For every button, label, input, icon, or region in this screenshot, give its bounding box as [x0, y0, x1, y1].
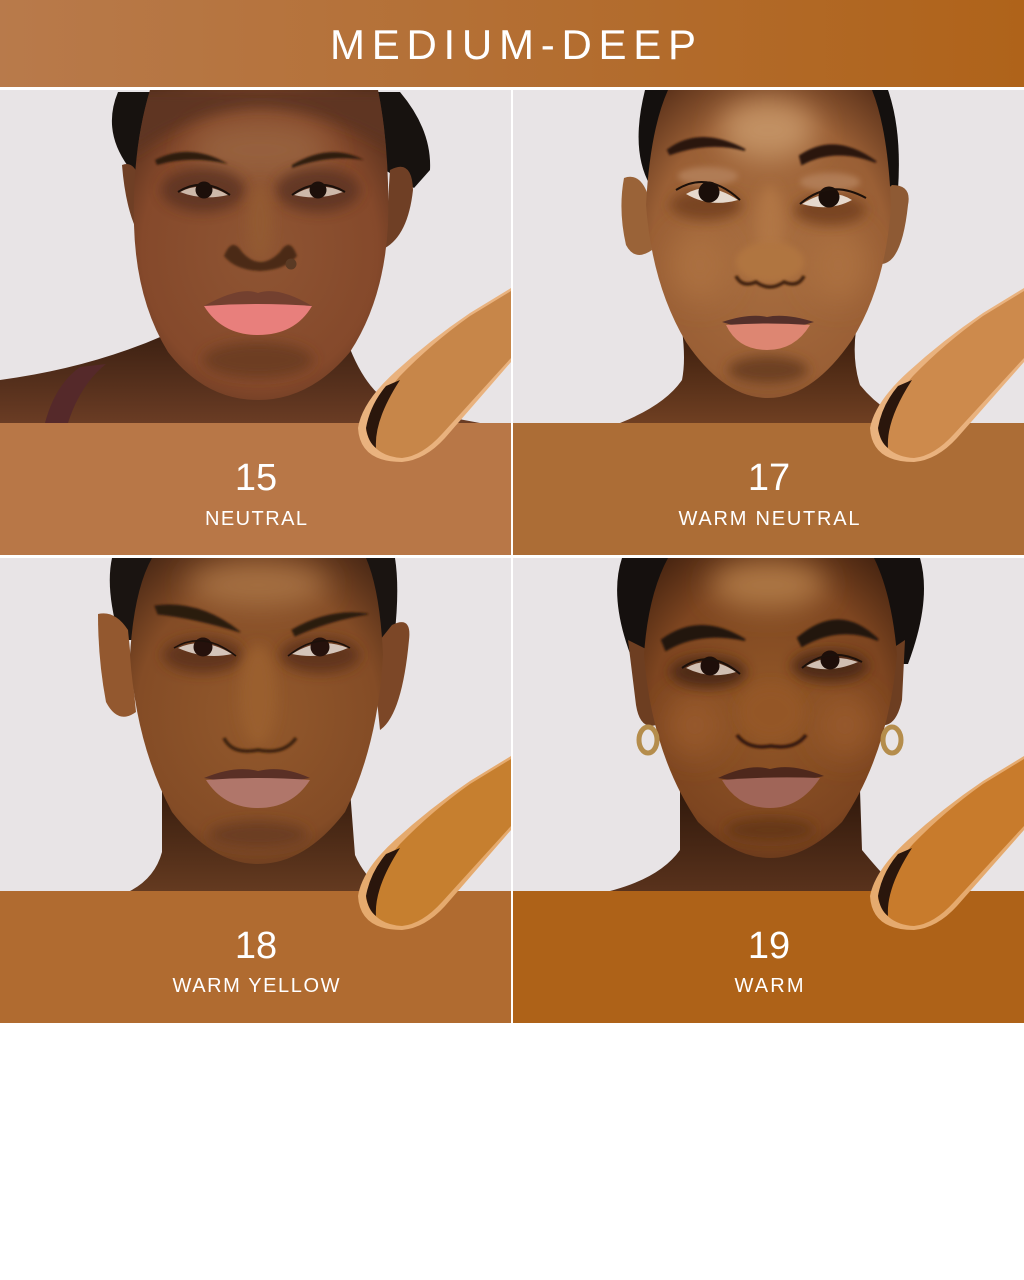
panel: shade 15 neutral [0, 90, 511, 555]
photo: model 19 [513, 558, 1024, 891]
swatch [358, 756, 511, 930]
shade number: 19 [748, 925, 790, 967]
label band [513, 423, 1024, 555]
photo: model 17 [513, 90, 1024, 423]
label band [513, 891, 1024, 1023]
shade number: 17 [748, 457, 790, 499]
swatch [358, 288, 511, 462]
photo: model 15 [0, 90, 511, 423]
panel: shade 17 warm neutral [513, 90, 1024, 555]
shade name: WARM YELLOW [172, 975, 340, 997]
label band [0, 423, 511, 555]
infographic canvas [0, 0, 1024, 1023]
panel: shade 19 warm [513, 558, 1024, 1023]
shade number: 15 [235, 457, 277, 499]
swatch [870, 288, 1024, 462]
shade number: 18 [235, 925, 277, 967]
panel: shade 18 warm yellow [0, 558, 511, 1023]
photo: model 18 [0, 558, 511, 891]
swatch [870, 756, 1024, 930]
header banner [0, 0, 1024, 87]
label band [0, 891, 511, 1023]
shade name: NEUTRAL [205, 508, 307, 530]
title: MEDIUM-DEEP [330, 21, 696, 68]
earrings [639, 727, 901, 753]
shade name: WARM NEUTRAL [678, 508, 860, 530]
shade name: WARM [734, 975, 804, 997]
